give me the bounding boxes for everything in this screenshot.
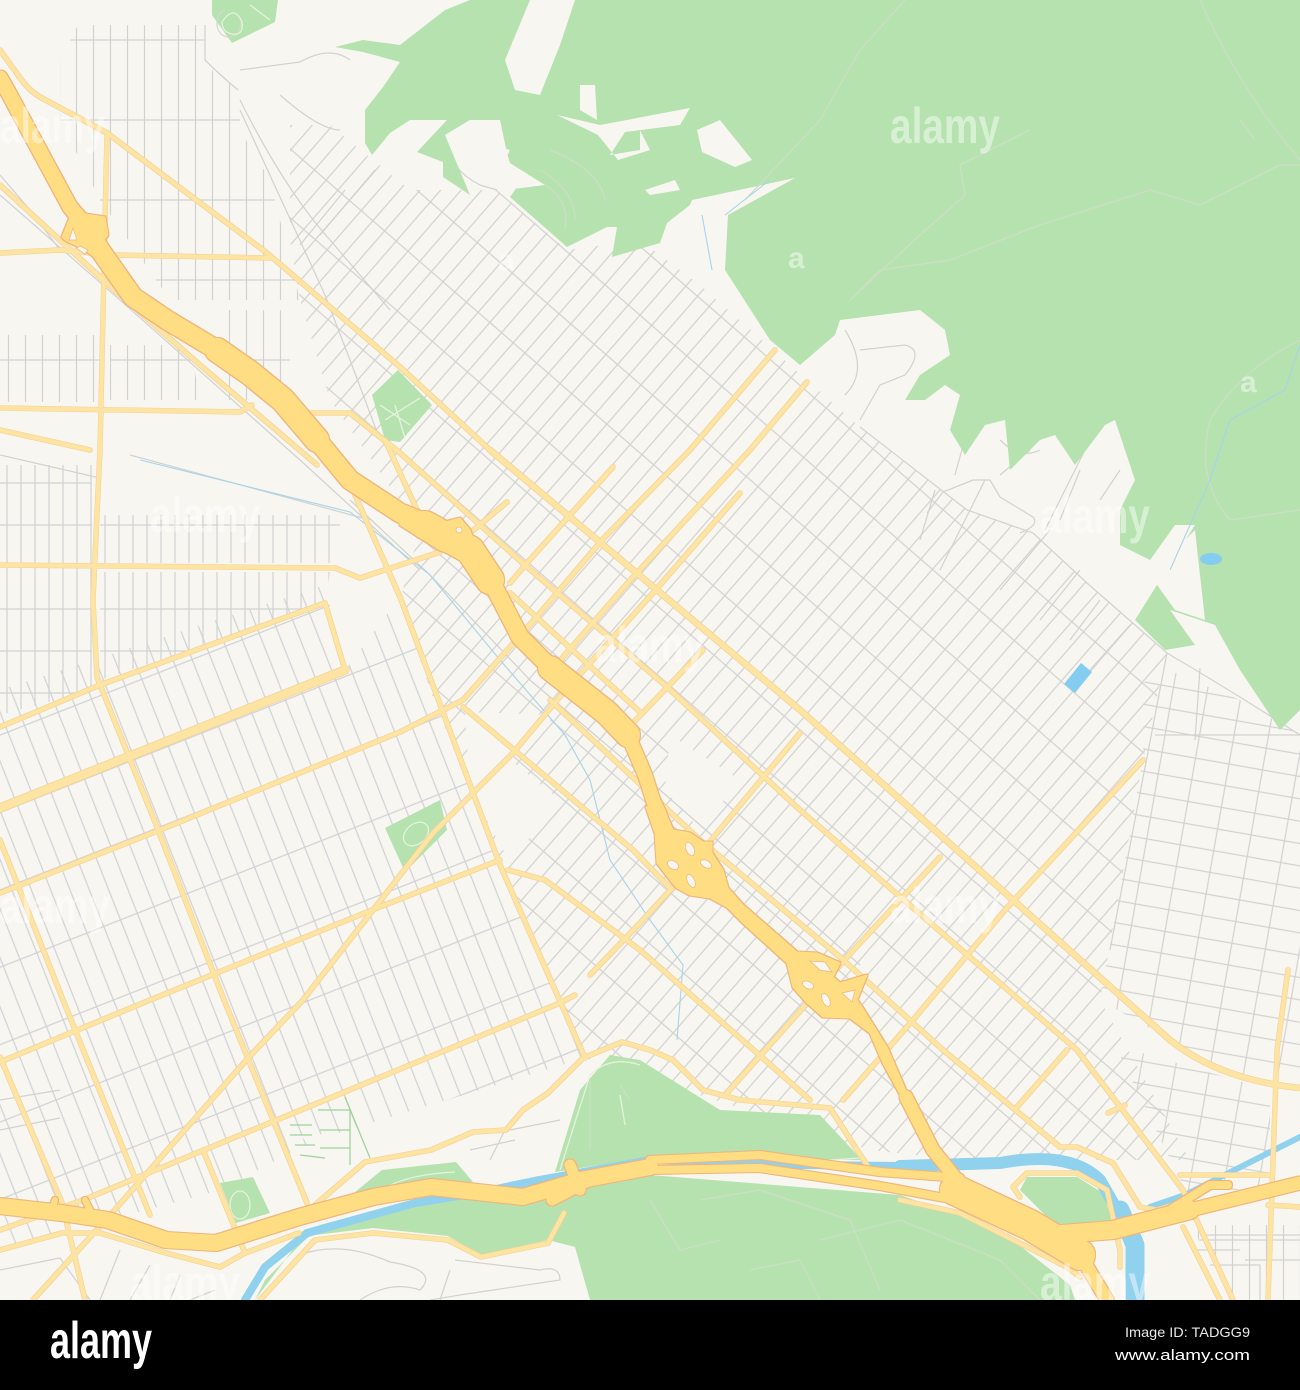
- image id: Image ID: TADGG9: [1125, 1324, 1250, 1340]
- park: strip above freeway: [349, 1162, 473, 1197]
- empty lots over grids: [300, 712, 740, 1190]
- park: stadium: [385, 800, 447, 872]
- watermarks: a: [498, 244, 515, 277]
- interchange: burbank west: [400, 505, 490, 573]
- footer logo: alamy: [50, 1312, 152, 1370]
- clearings in the hills: [445, 0, 1205, 620]
- watermarks: alamy: [890, 98, 1000, 154]
- park: river north: [555, 1055, 862, 1172]
- watermarks: alamy: [150, 487, 260, 543]
- campus blocks: [290, 1097, 370, 1165]
- watermarks: a: [788, 242, 805, 275]
- freeway: downtown section: [487, 573, 563, 680]
- interchange holes: [69, 228, 855, 1008]
- park: interchange island: [1020, 1177, 1113, 1227]
- trails in the hills: [217, 0, 1300, 1300]
- watermarks: alamy: [130, 1255, 240, 1311]
- lake: [1064, 663, 1092, 693]
- northern hills: [335, 0, 1300, 730]
- watermarks: alamy: [1040, 488, 1150, 544]
- watermarks: alamy: [1040, 1255, 1150, 1311]
- freeway: south west to east: [0, 1167, 650, 1243]
- watermarks: alamy: [595, 617, 705, 673]
- green hills and parks: [212, 0, 1300, 1300]
- streams: [140, 180, 1300, 1040]
- footer band: [0, 1300, 1300, 1390]
- watermarks: alamy: [0, 98, 105, 154]
- freeway: south-east section: [906, 1097, 957, 1180]
- freeway: north-west section: [0, 78, 87, 227]
- pond: [1200, 553, 1222, 565]
- watermarks: alamy: [890, 878, 1000, 934]
- interchange: south-west: [50, 1200, 95, 1220]
- park: Verdugo rec: [372, 370, 432, 442]
- freeway: central and east interchanges: [646, 800, 910, 1100]
- watermarks: a: [1240, 366, 1257, 399]
- interchange: north-west: [62, 212, 108, 265]
- park: small southwest: [220, 1177, 270, 1223]
- white paths in the parks: [222, 5, 860, 1219]
- river: [245, 1137, 1300, 1300]
- watermarks: alamy: [0, 878, 110, 934]
- park: griffith south: [255, 1175, 1075, 1300]
- website: www.alamy.com: [1114, 1347, 1250, 1364]
- park: northwest oval: [212, 0, 278, 43]
